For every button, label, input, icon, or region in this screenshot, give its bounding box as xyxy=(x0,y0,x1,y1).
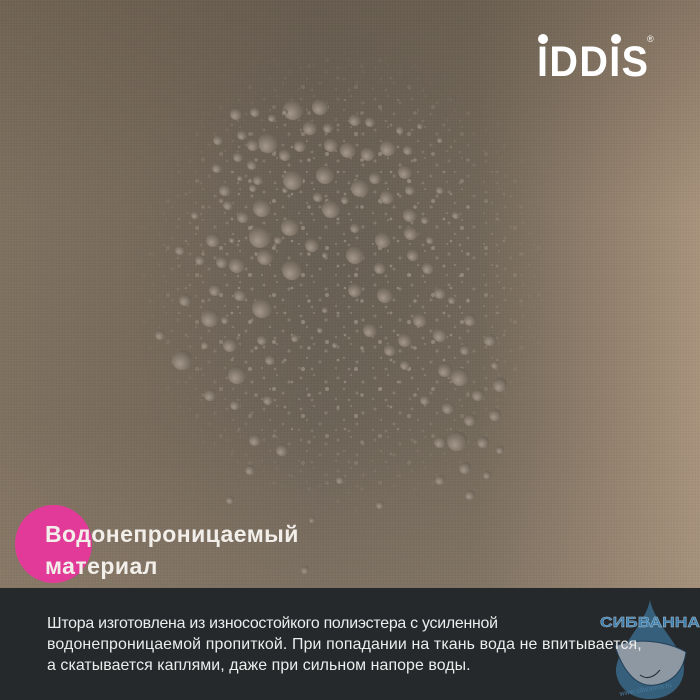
bathtub xyxy=(615,641,686,685)
water drop xyxy=(616,600,684,699)
dark description band xyxy=(0,588,700,700)
description text: а скатывается каплями, даже при сильном напоре воды. xyxy=(47,657,471,674)
description text: водонепроницаемой пропиткой. При попадании на ткань вода не впитывается, xyxy=(47,636,642,653)
dot on first letter xyxy=(538,34,548,44)
heading: Водонепроницаемый xyxy=(45,521,299,547)
brand name: СИБВАННА xyxy=(600,615,700,631)
website: www.sibvanna.ru xyxy=(618,682,673,698)
heading: материал xyxy=(45,553,158,579)
description text xyxy=(47,615,642,674)
bathtub face xyxy=(640,670,660,678)
watermark: Sibvanna logo xyxy=(600,600,700,699)
dot on fourth letter xyxy=(611,34,621,44)
logo wordmark: IDDIS xyxy=(537,38,649,86)
heading xyxy=(45,521,299,579)
registered mark: ® xyxy=(647,34,654,44)
water droplets xyxy=(155,99,507,574)
pink circle accent xyxy=(15,505,92,583)
description text: Штора изготовлена из износостойкого полиэстера с усиленной xyxy=(47,615,498,632)
logo: IDDIS xyxy=(537,34,654,86)
